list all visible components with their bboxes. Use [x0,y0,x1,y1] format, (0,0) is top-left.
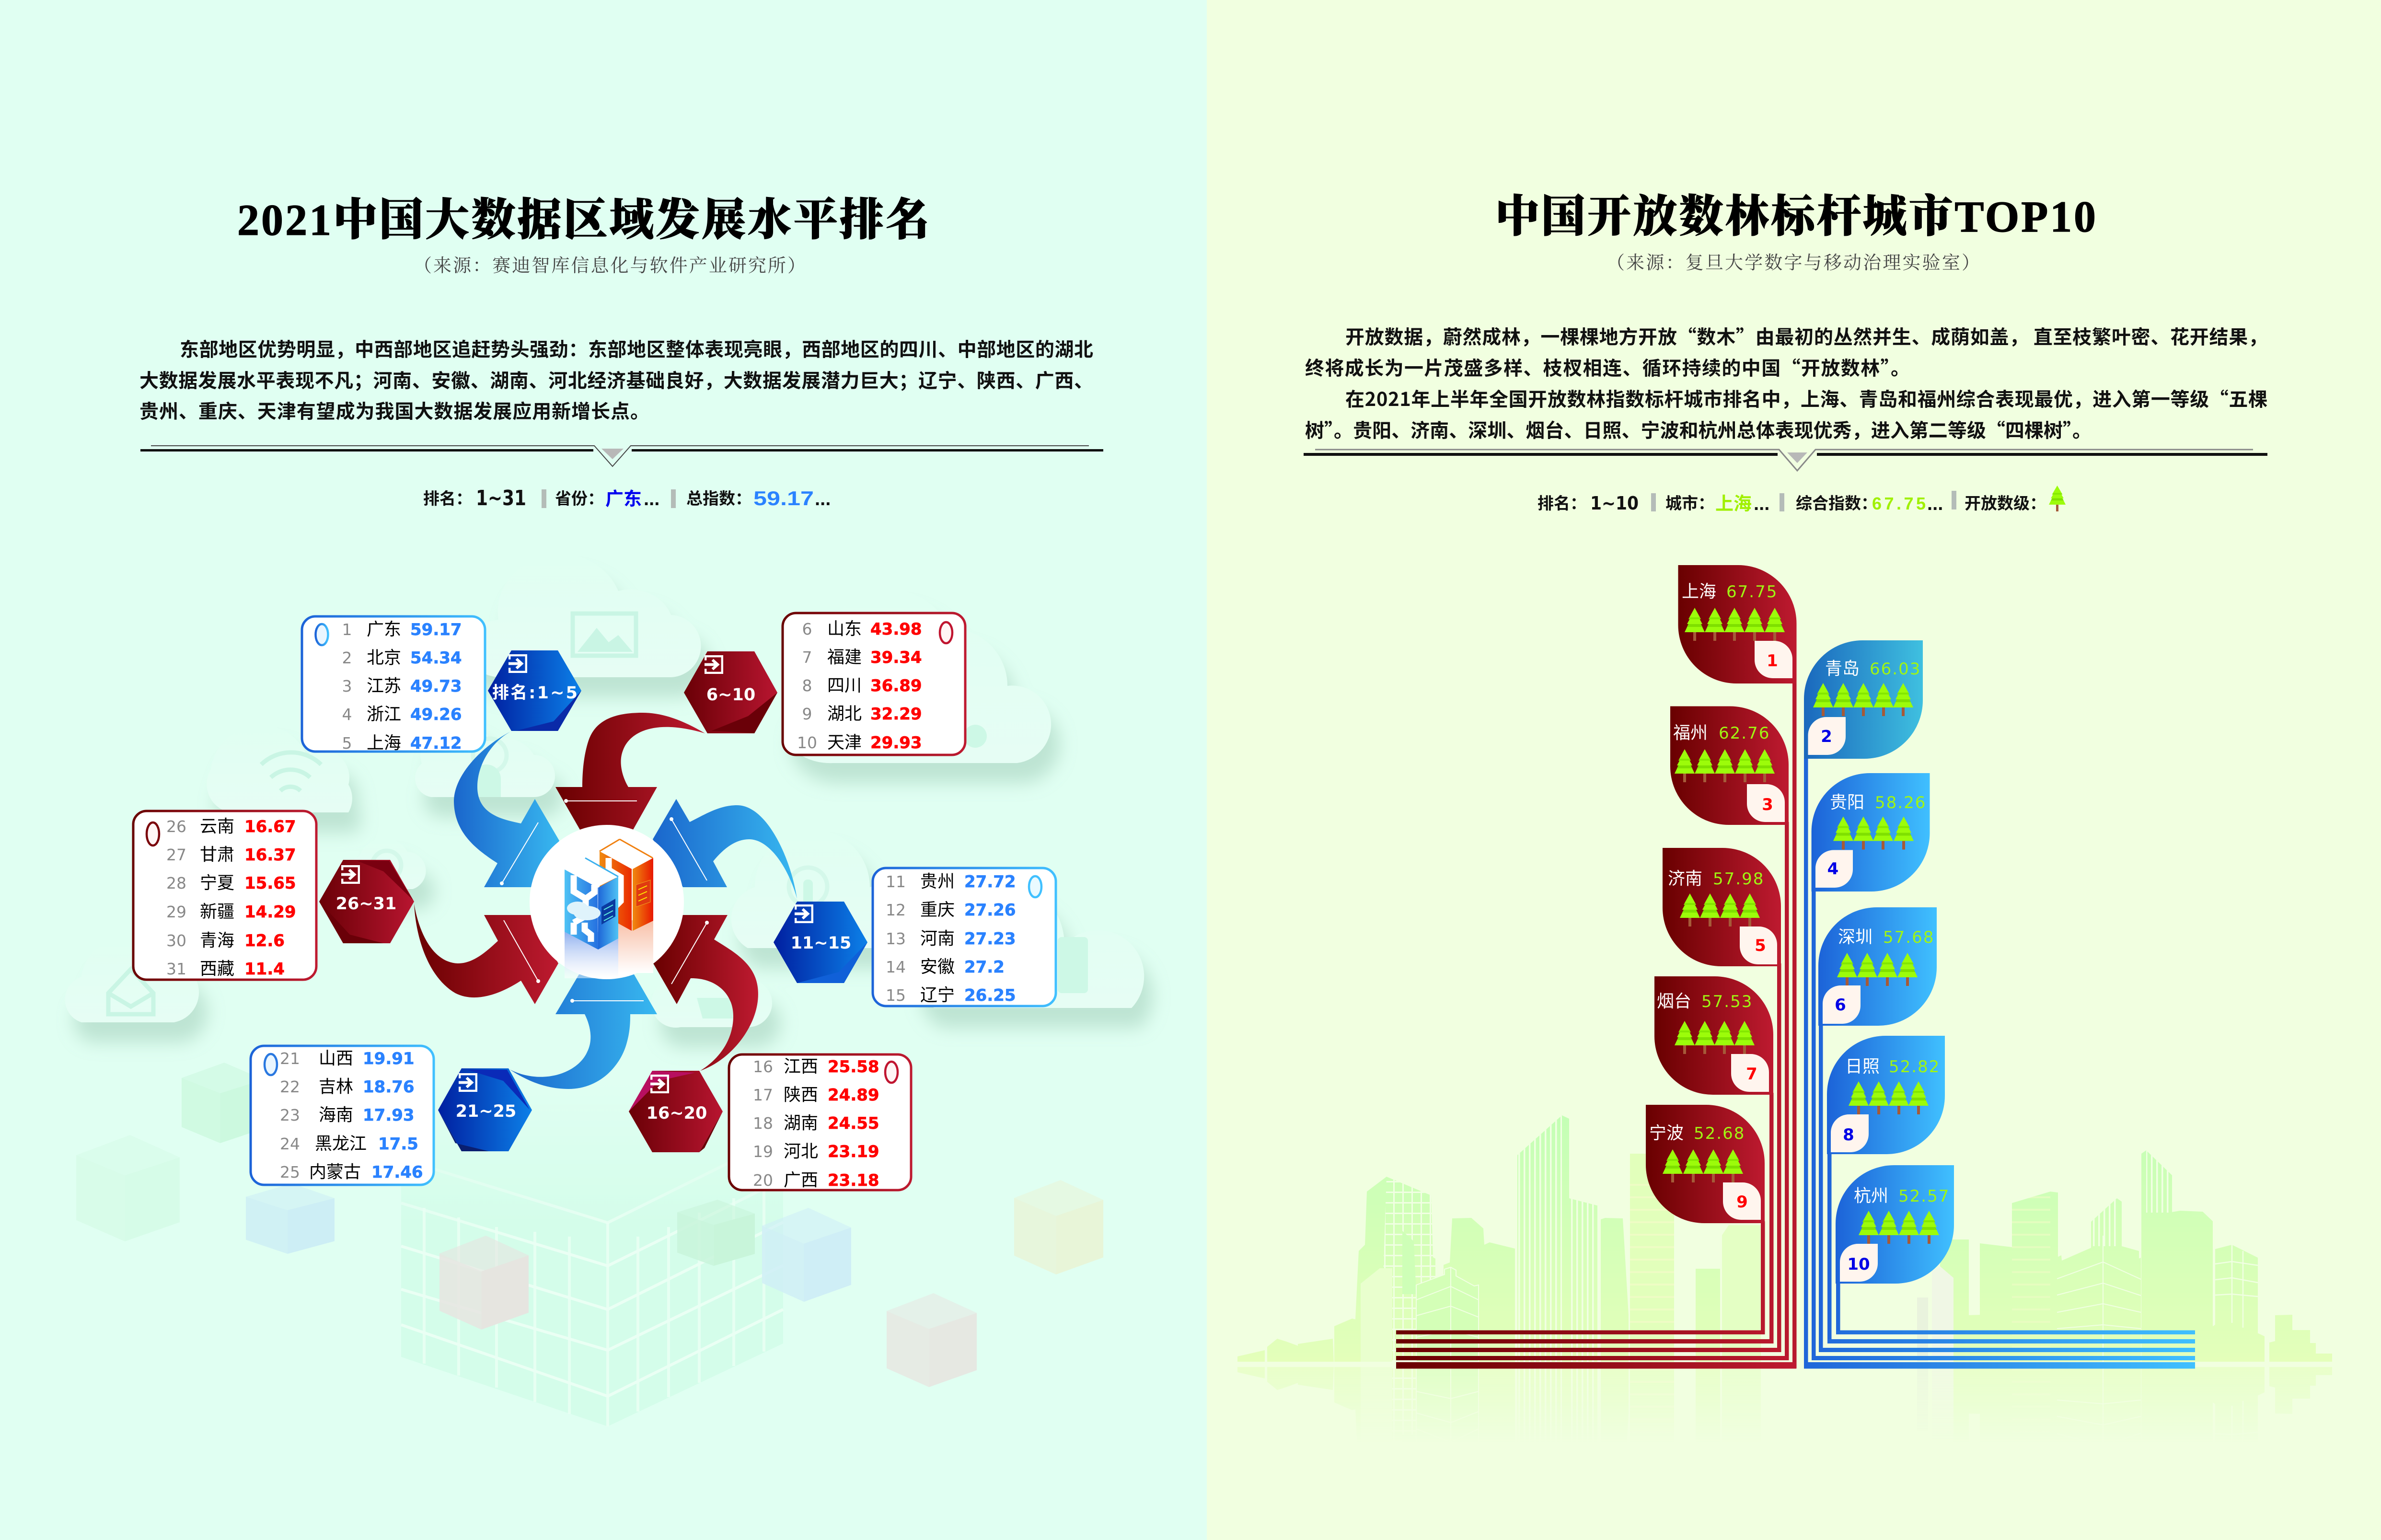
title: 2021中国大数据区域发展水平排名 [237,196,930,244]
card: rank 1~5: 4 [342,705,352,724]
leaf 9: Ningbo [1646,1105,1765,1223]
leaf 9: Ningbo: 52.68 [1694,1124,1745,1143]
card: rank 21~25: 吉林 [319,1073,353,1098]
arrow: 26~31 to centre [414,904,558,1004]
card: rank 6~10: 山东 [827,615,862,640]
card: rank 11~15: 14 [886,958,906,976]
card: rank 26~31: 29 [166,903,186,921]
intro paragraphs: 开放数据，蔚然成林，一棵棵地方开放“数木”由最初的丛然并生、成荫如盖， 直至枝繁叶密、花开结果， [1345,322,2267,349]
card: rank 21~25: 17.46 [371,1163,423,1182]
card: rank 11~15: 河南 [920,925,955,949]
leaf 9: Ningbo: 宁波 [1649,1119,1684,1144]
card: rank 1~5: 江苏 [367,672,401,697]
card: rank 11~15: 12 [886,901,906,919]
card: rank 11~15: 13 [886,929,906,948]
card: rank 1~5: 49.73 [410,677,462,696]
card: rank 6~10: 四川 [827,672,862,696]
leaf 1: Shanghai: 上海 [1682,578,1716,602]
card: rank 1~5 [302,615,485,754]
card: rank 26~31 [133,811,316,980]
card: rank 11~15: 安徽 [920,953,955,978]
card: rank 16~20 [729,1053,911,1191]
leaf 6: Shenzhen: 6 [1835,996,1846,1015]
hexagon: rank 26~31: 26~31 [336,894,396,914]
leaf 8: Rizhao: 52.82 [1889,1057,1940,1077]
hexagon: rank 21~25 [438,1068,532,1151]
leaf 8: Rizhao: 日照 [1845,1053,1880,1077]
legend: 开放数级： [1965,490,2046,514]
leaf 4: Guiyang: 4 [1827,859,1838,879]
card: rank 6~10: 天津 [827,729,862,753]
card: rank 26~31: 28 [166,874,186,892]
card: rank 16~20: 16 [753,1057,773,1076]
legend: ... [1754,493,1769,514]
leaf 5: Jinan [1663,848,1781,966]
legend [1537,486,2066,514]
card: rank 26~31: 16.37 [244,845,296,865]
hexagon: rank 11~15 [774,902,867,983]
leaf 2: Qingdao: 青岛 [1825,655,1860,680]
source note: （来源：赛迪智库信息化与软件产业研究所） [414,256,806,276]
blue stems and bars [1804,755,2195,1369]
card: rank 16~20: 18 [753,1114,773,1133]
card: rank 1~5: 上海 [367,729,401,754]
intro paragraphs [1305,322,2267,443]
legend: ... [1927,493,1943,514]
card: rank 26~31: 11.4 [244,960,285,979]
card: rank 16~20: 19 [753,1142,773,1161]
hexagon: rank 6~10 [684,651,777,733]
card: rank 11~15: 15 [886,986,906,1005]
divider with triangle [140,446,1103,466]
card: rank 21~25: 黑龙江 [315,1130,367,1155]
card: rank 16~20: 20 [753,1171,773,1190]
card: rank 21~25: 25 [280,1163,300,1181]
legend: 省份： [555,486,604,509]
card: rank 26~31: 15.65 [244,874,296,893]
card: rank 6~10: 6 [802,620,812,638]
card: rank 26~31: 甘肃 [200,841,234,866]
arrow: 21~25 to centre [509,974,657,1089]
card: rank 1~5: 5 [342,734,352,753]
card: rank 6~10: 36.89 [870,676,922,695]
skyline reflection [1237,1367,2332,1419]
card: rank 16~20: 23.18 [828,1171,879,1190]
card: rank 21~25: 内蒙古 [309,1158,361,1183]
leaf 10: Hangzhou [1836,1165,1954,1284]
card: rank 26~31: 27 [166,845,186,864]
leaf 6: Shenzhen: 深圳 [1838,923,1872,948]
card: rank 21~25: 17.93 [363,1106,415,1125]
card: rank 26~31: 31 [166,960,186,978]
leaf 10: Hangzhou: 杭州 [1854,1182,1888,1207]
intro paragraph: 东部地区优势明显，中西部地区追赶势头强劲：东部地区整体表现亮眼，西部地区的四川、中部地区的湖北 [180,334,1093,362]
hexagon: rank 1~5 [488,650,581,731]
card: rank 11~15: 贵州 [920,868,955,892]
card: rank 1~5: 3 [342,677,352,695]
intro paragraph: 大数据发展水平表现不凡；河南、安徽、湖南、河北经济基础良好，大数据发展潜力巨大；辽宁、陕西、广西、 [139,365,1093,393]
leaf 4: Guiyang [1812,773,1930,892]
intro paragraphs: 在2021年上半年全国开放数林指数标杆城市排名中，上海、青岛和福州综合表现最优，进入第一等级“五棵 [1345,384,2267,412]
hexagon: rank 26~31 [319,860,414,943]
card: rank 1~5: 49.26 [410,705,462,724]
card: rank 26~31: 新疆 [200,898,234,923]
leaf 10: Hangzhou: 52.57 [1898,1187,1950,1206]
legend: 59.17 [753,487,814,509]
leaf 6: Shenzhen: 57.68 [1883,928,1934,947]
leaf 6: Shenzhen [1818,907,1937,1026]
intro paragraphs: 树”。贵阳、济南、深圳、烟台、日照、宁波和杭州总体表现优秀，进入第二等级“四棵树”。 [1305,415,2092,443]
card: rank 6~10: 福建 [827,643,862,668]
card: rank 21~25: 24 [280,1135,300,1153]
leaf 4: Guiyang: 贵阳 [1830,788,1864,813]
leaf 1: Shanghai: 1 [1767,651,1778,671]
leaf 2: Qingdao: 2 [1821,727,1832,746]
card: rank 26~31: 16.67 [244,817,296,836]
card: rank 11~15: 27.72 [964,872,1016,892]
legend: 1~10 [1590,493,1639,514]
hexagon: rank 16~20 [629,1071,723,1152]
leaf 5: Jinan: 5 [1755,936,1766,955]
arrow: 16~20 to centre [653,915,758,1071]
card: rank 11~15: 辽宁 [920,981,955,1006]
panel: right open data forest [1237,192,2332,1540]
hexagon: rank 1~5: 排名:1~5 [492,683,578,703]
red stems and bars [1396,681,1796,1369]
legend: 广东 [605,489,642,509]
intro paragraph: 贵州、重庆、天津有望成为我国大数据发展应用新增长点。 [139,396,649,424]
card: rank 6~10: 10 [797,733,817,752]
card: rank 26~31: 30 [166,931,186,950]
skyline [1237,1115,2332,1362]
legend: ... [815,488,831,509]
card: rank 1~5: 59.17 [410,620,462,639]
card: rank 11~15: 11 [886,872,906,891]
leaf 1: Shanghai: 67.75 [1726,582,1778,602]
card: rank 6~10: 9 [802,705,812,723]
card: rank 11~15: 27.26 [964,901,1016,920]
card: rank 16~20: 陕西 [784,1081,818,1106]
card: rank 11~15: 重庆 [920,896,955,921]
leaf 4: Guiyang: 58.26 [1875,793,1926,812]
leaf 3: Fuzhou: 3 [1762,795,1773,814]
card: rank 1~5: 浙江 [367,700,401,725]
card: rank 11~15: 27.23 [964,929,1016,949]
card: rank 21~25: 山西 [319,1044,353,1069]
leaf 7: Yantai: 7 [1746,1065,1757,1084]
card: rank 26~31: 西藏 [200,955,234,980]
card: rank 11~15 [873,868,1056,1006]
arrow: 1~5 to centre [454,731,559,887]
centre circle [530,825,684,979]
card: rank 26~31: 宁夏 [200,869,234,894]
card: rank 26~31: 云南 [200,812,234,837]
card: rank 26~31: 12.6 [244,931,285,950]
card: rank 21~25: 19.91 [363,1049,415,1068]
card: rank 16~20: 广西 [784,1166,818,1191]
card: rank 16~20: 25.58 [828,1057,879,1077]
card: rank 26~31: 14.29 [244,903,296,922]
card: rank 6~10 [783,613,965,755]
card: rank 1~5: 2 [342,648,352,667]
leaf 9: Ningbo: 9 [1736,1193,1748,1212]
legend: 1~31 [476,486,526,510]
panel: left big data ranking [65,196,1144,1426]
card: rank 1~5: 广东 [367,615,401,640]
card: rank 1~5: 1 [342,620,352,639]
card: rank 16~20: 24.89 [828,1086,879,1105]
leaf 1: Shanghai [1678,565,1796,683]
legend: 排名： [1537,490,1586,514]
legend: 67.75 [1872,494,1926,513]
card: rank 16~20: 河北 [784,1137,818,1162]
hexagon: rank 6~10: 6~10 [706,685,755,705]
card: rank 6~10: 43.98 [870,620,922,639]
arrow: 11~15 to centre [653,799,797,899]
card: rank 16~20: 17 [753,1086,773,1104]
card: rank 21~25: 海南 [319,1101,353,1126]
hexagon: rank 16~20: 16~20 [647,1104,707,1123]
card: rank 6~10: 8 [802,676,812,695]
leaf 3: Fuzhou [1670,706,1789,825]
card: rank 11~15: 26.25 [964,986,1016,1005]
legend: 总指数： [686,486,751,509]
card: rank 6~10: 32.29 [870,705,922,724]
card: rank 11~15: 27.2 [964,958,1005,977]
card: rank 1~5: 47.12 [410,734,462,753]
legend: ... [644,488,659,509]
card: rank 21~25: 22 [280,1077,300,1096]
hexagon: rank 11~15: 11~15 [791,934,851,953]
card: rank 26~31: 青海 [200,926,234,951]
card: rank 6~10: 39.34 [870,648,922,667]
card: rank 21~25: 21 [280,1049,300,1068]
source note: （来源：复旦大学数字与移动治理实验室） [1607,253,1980,273]
card: rank 6~10: 湖北 [827,700,862,725]
leaf 7: Yantai [1654,976,1773,1095]
icon: books [565,839,653,978]
card: rank 21~25: 18.76 [363,1077,415,1097]
card: rank 6~10: 29.93 [870,733,922,753]
legend: 城市： [1665,490,1714,514]
card: rank 16~20: 23.19 [828,1142,879,1161]
intro paragraph [139,334,1093,424]
legend [423,486,831,510]
intro paragraphs: 终将成长为一片茂盛多样、枝杈相连、循环持续的中国“开放数林”。 [1305,353,1910,381]
leaf 7: Yantai: 烟台 [1657,987,1691,1012]
title: 中国开放数林标杆城市TOP10 [1495,192,2096,241]
leaf 7: Yantai: 57.53 [1701,992,1753,1011]
card: rank 16~20: 湖南 [784,1109,818,1134]
leaf 10: Hangzhou: 10 [1847,1255,1870,1274]
hexagon: rank 21~25: 21~25 [456,1102,516,1121]
arrow: 6~10 to centre [555,713,705,830]
card: rank 16~20: 24.55 [828,1114,879,1133]
leaf 5: Jinan: 济南 [1668,865,1702,890]
legend: 排名： [423,486,472,509]
divider with triangle [1304,450,2267,471]
card: rank 21~25: 17.5 [378,1135,418,1154]
leaf 8: Rizhao: 8 [1843,1125,1854,1145]
legend: 上海 [1715,494,1752,514]
card: rank 1~5: 54.34 [410,648,462,668]
leaf 8: Rizhao [1827,1036,1945,1154]
card: rank 21~25: 23 [280,1106,300,1124]
card: rank 21~25 [251,1044,434,1185]
leaf 5: Jinan: 57.98 [1713,869,1764,889]
leaf 3: Fuzhou: 福州 [1673,719,1708,744]
leaf 3: Fuzhou: 62.76 [1719,724,1770,743]
legend: 综合指数： [1796,490,1877,514]
card: rank 1~5: 北京 [367,644,401,669]
card: rank 6~10: 7 [802,648,812,667]
cloud icons [108,614,1088,1019]
card: rank 26~31: 26 [166,817,186,836]
card: rank 16~20: 江西 [784,1053,818,1077]
background clouds [65,554,1144,1028]
leaf 2: Qingdao: 66.03 [1870,660,1921,679]
background block and cubes [76,1063,1103,1426]
leaf 2: Qingdao [1804,640,1923,759]
